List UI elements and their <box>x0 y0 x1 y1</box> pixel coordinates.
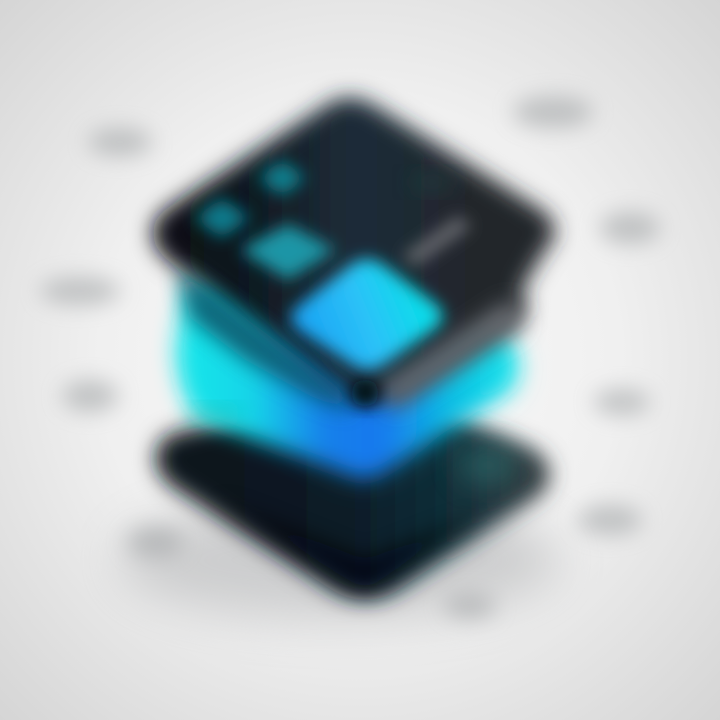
teal shadow on middle layer <box>178 268 350 412</box>
label: bottom right <box>578 505 642 535</box>
label: top right <box>513 96 593 128</box>
blurred labels <box>40 96 660 618</box>
label: left middle <box>40 277 120 305</box>
grey lower edge of top layer <box>378 298 525 410</box>
floor shadow <box>120 500 560 620</box>
middle glowing layer <box>176 260 520 478</box>
top dark layer <box>152 97 555 402</box>
label: top left <box>88 128 152 156</box>
cyan blue sheet <box>176 260 518 478</box>
small tile: centre <box>240 224 336 280</box>
label: bottom left <box>127 527 183 557</box>
grey stripe <box>402 216 472 266</box>
dark plate <box>155 383 550 600</box>
label: right upper <box>600 212 660 244</box>
label: left lower <box>62 380 118 412</box>
teal sheen <box>458 445 518 485</box>
dark tip <box>351 379 379 407</box>
faint green stripe <box>410 172 454 192</box>
small tile: left <box>194 198 250 238</box>
bright cyan tile <box>291 259 443 370</box>
green tint at left foot <box>185 406 245 422</box>
small tile: upper <box>258 160 306 196</box>
bottom dark layer <box>155 383 550 600</box>
label: bottom centre <box>444 594 496 618</box>
label: right lower <box>594 389 650 415</box>
glow <box>185 270 520 470</box>
darker lower edge <box>215 500 480 590</box>
